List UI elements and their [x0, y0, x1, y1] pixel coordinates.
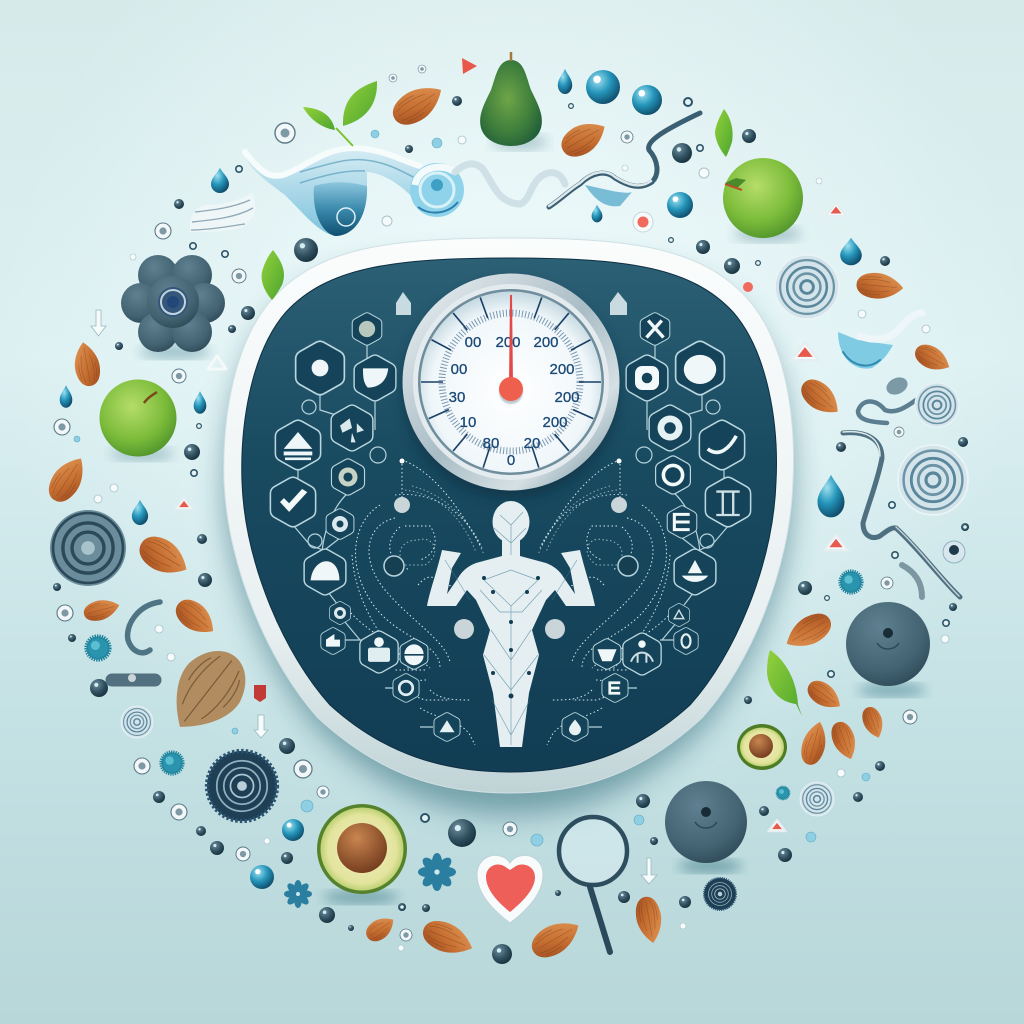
dark stone ball bottom [665, 781, 747, 873]
icon: hex check [270, 477, 316, 527]
leaves [262, 81, 802, 716]
human body figure [427, 501, 595, 747]
icon: hex curve [699, 420, 745, 470]
icon: hex dome [304, 549, 346, 595]
gauge numbers: 200 [533, 334, 559, 351]
gauge numbers: 200 [542, 414, 568, 431]
white triangle marker [208, 356, 226, 369]
gauge numbers: 10 [460, 414, 476, 431]
gauge face [420, 292, 602, 472]
body mesh lines [445, 512, 577, 745]
body joint dots [482, 576, 540, 698]
icon: hex eye [330, 602, 350, 624]
icon: hex e [602, 674, 628, 702]
icon: hex boat [674, 549, 716, 595]
pipe right [843, 432, 960, 597]
icon: hex face [676, 341, 724, 395]
pear avocado [480, 52, 548, 150]
magnifying glass [559, 817, 627, 952]
apple left [100, 380, 176, 461]
icon: hex triangle [434, 713, 460, 741]
gauge minor ticks [442, 313, 580, 451]
blue swoosh right [838, 313, 922, 369]
ribbon white tube [455, 164, 565, 204]
gauge shadow [403, 282, 619, 498]
icon: hex bowl [354, 355, 396, 401]
small home icons [396, 292, 627, 315]
scale dark panel [242, 258, 776, 772]
blue flower ornaments [284, 853, 456, 908]
dial gauge [402, 274, 620, 498]
avocado half large [317, 804, 407, 904]
gauge outer ring [402, 274, 620, 490]
weighing scale [224, 238, 794, 793]
almonds [42, 77, 954, 964]
small scattered droplets [53, 96, 969, 931]
gray pebble [884, 374, 910, 398]
icon: hex drop small [562, 713, 588, 741]
circuit connector lines [293, 344, 729, 727]
icon: hex oval [674, 628, 698, 654]
gauge numbers: 80 [483, 435, 499, 452]
icon: hex E [667, 506, 697, 538]
gray sensor dots [394, 458, 627, 639]
icon: hex drop [649, 405, 691, 451]
icon: hex person [360, 631, 398, 673]
scale white rim [224, 238, 794, 793]
icon: hex small top [352, 313, 382, 345]
gauge numbers: 200 [549, 361, 575, 378]
small light blue drops [74, 130, 870, 846]
small red markers [175, 58, 848, 831]
icon: hex bars [705, 477, 751, 527]
avocado half small [737, 724, 787, 770]
hexagon icons right [562, 313, 751, 741]
top ribbon wave left [243, 148, 420, 236]
gauge long ticks [421, 297, 601, 468]
heart icon [477, 855, 543, 923]
bent connector left [112, 602, 160, 682]
ribbon swirl [410, 163, 464, 217]
scale soft shadow [224, 260, 794, 815]
icon: hex square ring [626, 355, 668, 401]
gauge numbers: 20 [524, 435, 540, 452]
icon: hex cross [640, 313, 670, 345]
large water drops and spheres [60, 69, 862, 964]
icon: hex dish [400, 639, 428, 669]
icon: hex circle [296, 341, 344, 395]
body silhouette [427, 538, 595, 747]
icon: hex loop [326, 509, 354, 539]
gauge numbers: 0 [507, 452, 515, 469]
gauge needle [499, 295, 523, 404]
white swoosh left [190, 193, 255, 232]
large almond [155, 637, 260, 747]
icon: hex shield [331, 459, 365, 495]
icon: hex bean [656, 456, 690, 494]
dark stone flower [121, 255, 225, 359]
gauge numbers: 00 [465, 334, 481, 351]
gauge numbers: 200 [554, 389, 580, 406]
gauge numbers: 30 [449, 389, 465, 406]
gray tube with bend [549, 113, 700, 207]
gauge numbers: 00 [451, 361, 467, 378]
hexagon icons left [270, 313, 460, 741]
hook tube [858, 400, 916, 423]
icon: hex triangle small [669, 604, 689, 626]
icon: hex bag [321, 628, 345, 654]
short tube [902, 565, 922, 597]
icon: hex lines [623, 633, 661, 675]
gauge numbers [449, 334, 580, 469]
teal bursts [86, 571, 862, 799]
body head [492, 501, 530, 543]
spiral discs [50, 255, 968, 910]
icon: hex marks [331, 405, 373, 451]
arrow icons [91, 310, 657, 884]
ribbon fan [585, 185, 632, 206]
apple top right [723, 158, 803, 242]
dark eye ring [943, 541, 965, 563]
dotted flow lines [348, 460, 674, 745]
dark stone ball right [846, 602, 930, 697]
icon: hex S [393, 674, 419, 702]
icon: hex cake [275, 420, 321, 470]
small ring beads [54, 65, 967, 951]
gauge numbers: 200 [495, 334, 521, 351]
icon: hex bowl small [593, 639, 621, 669]
